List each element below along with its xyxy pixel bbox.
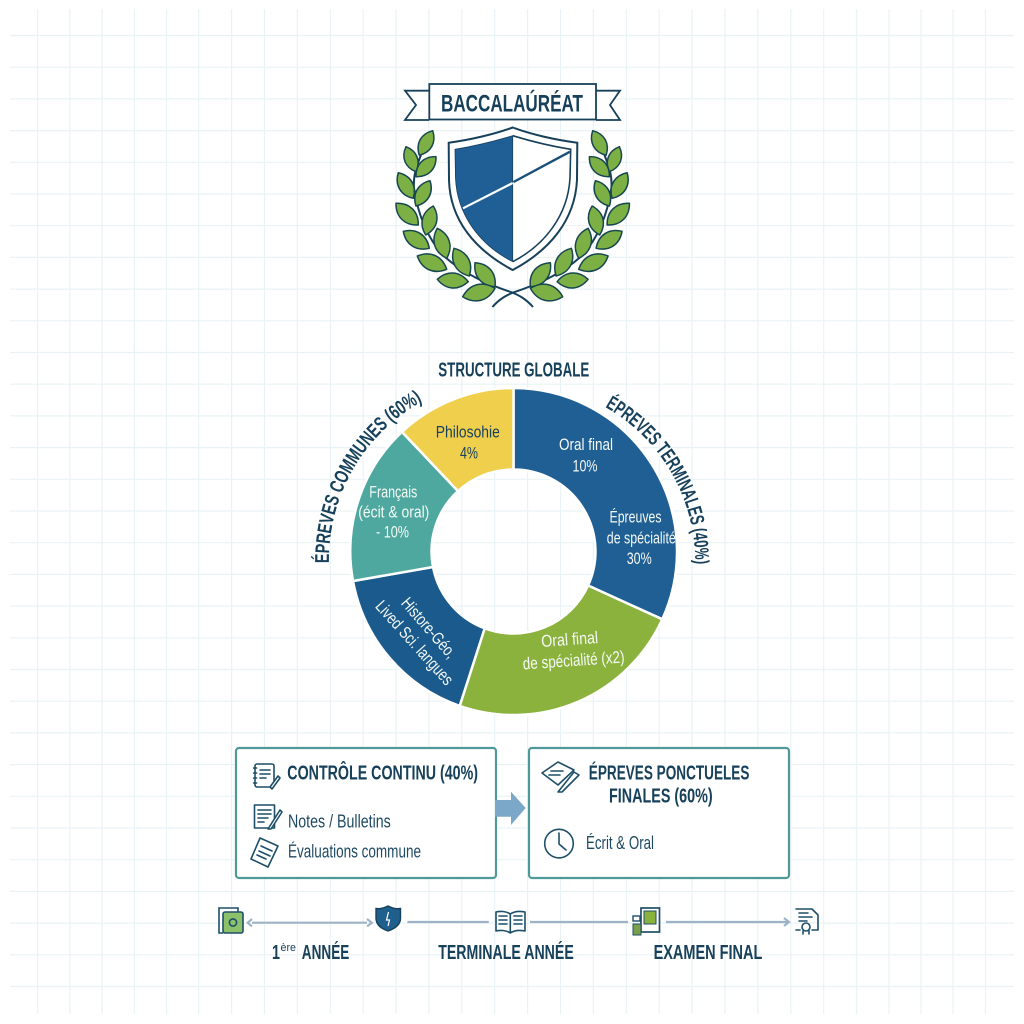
label: 1ère année: ère	[280, 942, 296, 954]
slice: épreuves de spécialité, oral final: Oral final	[559, 435, 613, 454]
text: notes / bulletins: Notes / Bulletins	[288, 812, 391, 832]
icon: document and pen	[254, 805, 282, 829]
slice: oral final de spécialité: Oral final	[541, 628, 599, 651]
icon: open book	[496, 911, 525, 933]
timeline	[219, 906, 818, 964]
curved label: épreuves terminales: ÉPREVES TERMINALES (40%)	[606, 394, 710, 564]
panel: épreuves ponctuelles	[529, 748, 789, 878]
slice: épreuves de spécialité, oral final: Épreuves	[610, 507, 662, 526]
curved label: épreuves communes: ÉPREVES COMMUNES (60%)	[311, 390, 422, 562]
icon: shield	[376, 906, 400, 931]
label: 1ère année: 1	[272, 942, 280, 964]
label: terminale année: TERMINALE ANNÉE	[438, 941, 574, 964]
icon: green folder	[219, 908, 243, 933]
slice: philosophie: Philosohie	[436, 422, 500, 441]
text: écrit et oral: Écrit & Oral	[586, 833, 654, 853]
heading: épreuves ponctuelles finales: ÉPREVES PONCTUELES	[589, 761, 749, 784]
slice: oral final de spécialité: de spécialité (x2)	[522, 647, 625, 674]
slice: histoire-géo, langues: Histore-Géo,	[397, 594, 460, 662]
banner ribbon: BACCALAÚRÉAT	[441, 90, 583, 118]
label: examen final: EXAMEN FINAL	[654, 942, 762, 964]
label: 1ère année: ANNÉE	[302, 941, 349, 964]
laurel branch left	[391, 127, 533, 307]
icon: clock	[545, 829, 573, 858]
banner ribbon	[405, 84, 620, 120]
donut chart	[350, 388, 677, 715]
slice: épreuves de spécialité, oral final	[514, 388, 677, 619]
slice: histoire-géo, langues	[353, 567, 485, 706]
slice: histoire-géo, langues: Lived Sci. langues	[372, 597, 457, 689]
line	[530, 921, 628, 923]
arrow: continu to ponctuelles	[495, 792, 526, 825]
slice: oral final de spécialité	[460, 586, 662, 715]
panel: contrôle continu	[236, 748, 496, 878]
label: 1ère année	[272, 941, 349, 964]
icon: paper and pen	[542, 762, 579, 792]
text: évaluations commune: Évaluations commune	[288, 841, 421, 861]
arrow: double-headed	[248, 919, 372, 926]
panel: épreuves ponctuelles: FINALES (60%)	[609, 786, 713, 808]
slice: philosophie	[402, 388, 514, 491]
emblem: baccalauréat crest	[391, 84, 635, 307]
line	[407, 921, 489, 923]
slice: français: - 10%	[376, 523, 409, 542]
slice: épreuves de spécialité, oral final: 10%	[572, 457, 598, 476]
arrow: to diploma	[666, 918, 789, 926]
laurel branch right	[492, 127, 635, 307]
slice: français: Français	[369, 482, 417, 501]
icon: exam sheet	[633, 908, 660, 935]
icon: diploma	[796, 909, 818, 934]
slice: épreuves de spécialité, oral final: 30%	[627, 549, 652, 568]
slice: français: (écit & oral)	[358, 503, 429, 522]
slice: épreuves de spécialité, oral final: de spécialité	[607, 528, 676, 547]
slice: philosophie: 4%	[460, 444, 478, 463]
icon: notebook and pen	[254, 764, 280, 789]
heading: contrôle continu: CONTRÔLE CONTINU (40%)	[287, 760, 478, 784]
icon: slanted notepad	[251, 838, 278, 867]
heading: structure globale: STRUCTURE GLOBALE	[438, 360, 589, 382]
slice: français	[350, 432, 458, 581]
shield	[449, 128, 577, 270]
